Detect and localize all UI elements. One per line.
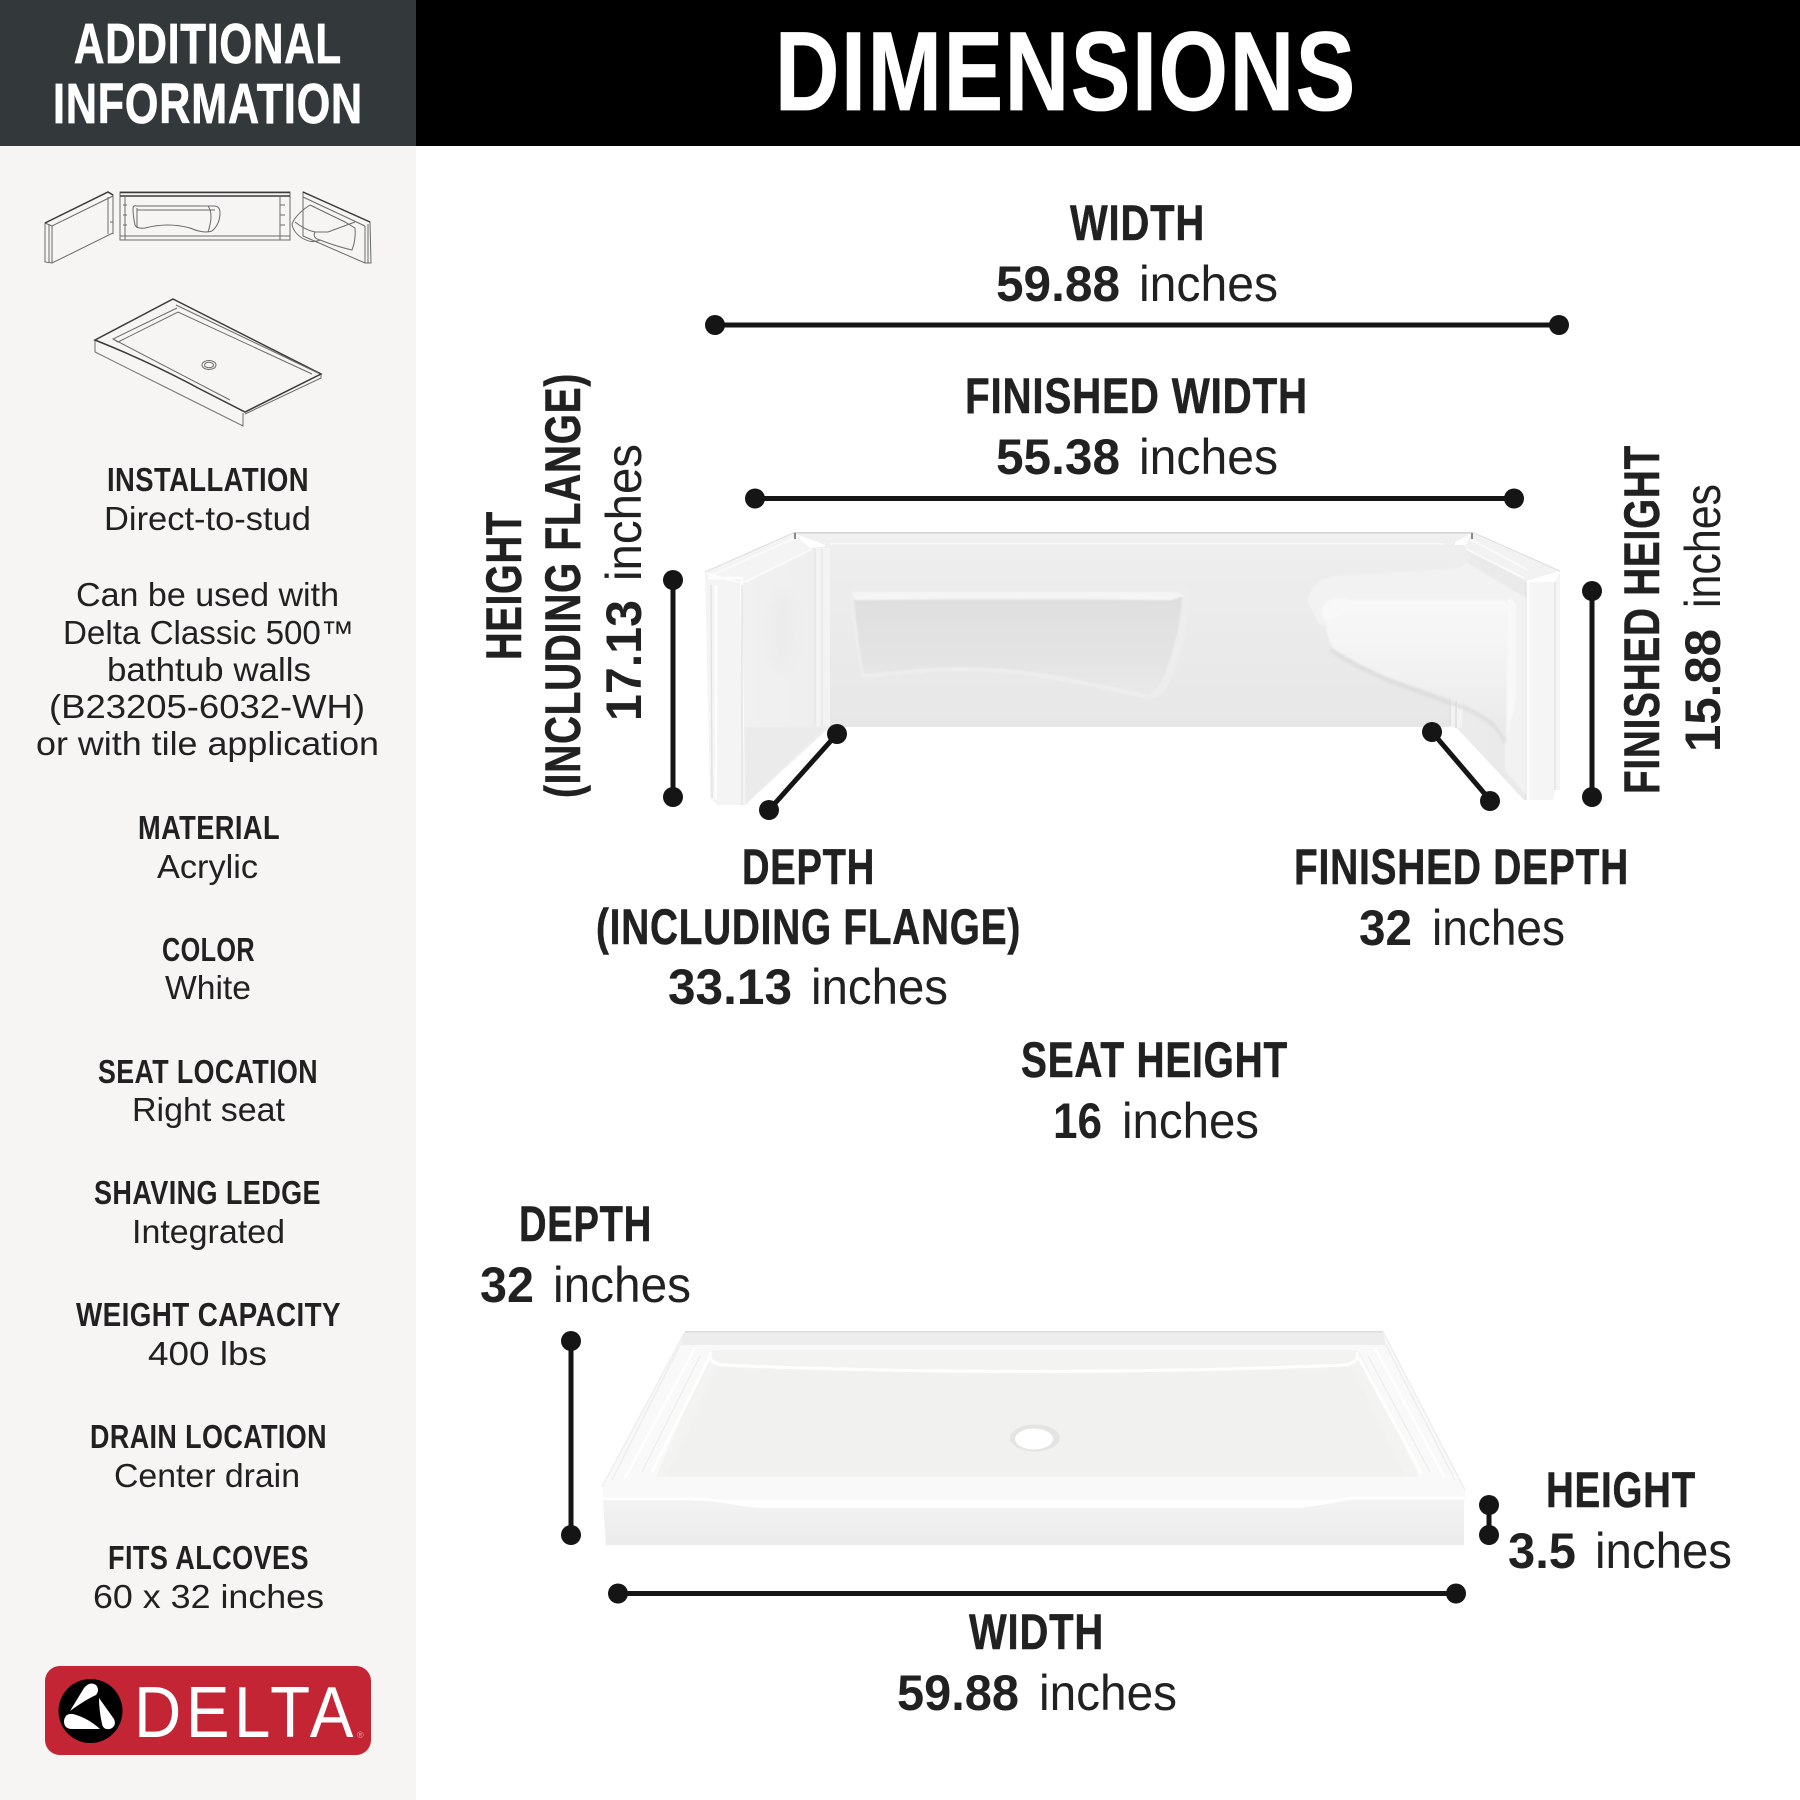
info: fits alcoves — [93, 1539, 324, 1615]
logo: delta — [45, 1666, 371, 1755]
seat shadow — [1330, 650, 1505, 742]
niche: shaving ledge — [848, 587, 1189, 699]
dimension: seat height: 16 — [1053, 1093, 1102, 1149]
dimension: base width — [608, 1584, 1466, 1721]
dimension: seat height: SEAT HEIGHT — [1021, 1032, 1288, 1088]
dimension: finished width: FINISHED WIDTH — [965, 368, 1308, 424]
info: weight capacity: WEIGHT CAPACITY — [76, 1296, 341, 1333]
info: drain location: DRAIN LOCATION — [90, 1418, 327, 1455]
dimension: finished height: 15.88 — [1675, 629, 1731, 752]
arrow: finished depth line — [1422, 722, 1500, 811]
dimension: finished depth: inches — [1432, 900, 1565, 956]
icon: wall panels line drawing — [45, 192, 371, 263]
dimension: base depth: 32 — [480, 1257, 534, 1313]
info: installation — [104, 461, 311, 537]
dimension: width: WIDTH — [1070, 195, 1205, 251]
image: bathtub wall set — [705, 532, 1560, 805]
back rim band — [680, 1332, 1386, 1345]
info: drain location: Center drain — [114, 1457, 300, 1494]
info: seat location — [98, 1053, 318, 1128]
sidebar heading: INFORMATION — [53, 72, 363, 136]
dimension: seat height — [1021, 1032, 1288, 1149]
sidebar heading: ADDITIONAL — [74, 12, 342, 76]
dimension: base height: inches — [1595, 1523, 1732, 1579]
info: seat location: SEAT LOCATION — [98, 1053, 318, 1090]
dimension: height including flange: 17.13 — [596, 600, 652, 721]
dimension: seat height: inches — [1122, 1093, 1259, 1149]
dimension: finished height — [1582, 445, 1731, 807]
dimension: base width: 59.88 — [897, 1665, 1019, 1721]
dimension: width: 59.88 — [996, 256, 1120, 312]
dimension: finished height: FINISHED HEIGHT — [1614, 445, 1670, 794]
dimension: depth including flange: (INCLUDING FLANGE) — [596, 899, 1021, 955]
top lip — [793, 533, 1472, 545]
info: fits alcoves: 60 x 32 inches — [93, 1578, 324, 1615]
sidebar heading — [0, 0, 416, 146]
info: material — [138, 809, 280, 885]
dimension: base height: HEIGHT — [1546, 1462, 1696, 1518]
dimension: depth including flange: DEPTH — [742, 839, 875, 895]
drain — [1010, 1424, 1060, 1452]
info: compatibility note: bathtub walls — [107, 651, 311, 688]
arrow: base width line — [608, 1584, 1466, 1604]
dimension: height including flange: inches — [596, 444, 652, 581]
info: color: COLOR — [162, 931, 255, 968]
dimension: finished depth — [1294, 722, 1629, 956]
dimension: base width: WIDTH — [969, 1604, 1104, 1660]
front face — [603, 1500, 1464, 1545]
info: color — [162, 931, 255, 1006]
dimension: height including flange: (INCLUDING FLANGE) — [535, 373, 591, 798]
info: weight capacity: 400 lbs — [148, 1335, 267, 1372]
info: fits alcoves: FITS ALCOVES — [108, 1539, 309, 1576]
info: shaving ledge: SHAVING LEDGE — [94, 1174, 321, 1211]
dimension: height including flange: HEIGHT — [476, 511, 532, 660]
info: compatibility note: Can be used with — [76, 576, 339, 613]
arrow: finished height line — [1582, 581, 1602, 807]
dimension: base depth: DEPTH — [519, 1196, 652, 1252]
back wall — [825, 543, 1455, 727]
info: compatibility note: or with tile application — [36, 725, 379, 762]
dimension: base depth: inches — [553, 1257, 691, 1313]
icon: shower base line drawing — [95, 299, 321, 426]
info: installation: Direct-to-stud — [104, 500, 311, 537]
dimension: depth including flange: 33.13 — [668, 959, 792, 1015]
logo: delta: ® — [357, 1730, 364, 1740]
arrow: base height line — [1479, 1495, 1499, 1545]
info: shaving ledge: Integrated — [132, 1213, 285, 1250]
logo: delta: DELTA — [134, 1673, 358, 1753]
image: shower base — [602, 1331, 1465, 1545]
right side panel — [1454, 545, 1526, 800]
info: compatibility note: Delta Classic 500™ — [63, 614, 354, 651]
basin floor — [656, 1350, 1419, 1477]
info: compatibility note: (B23205-6032-WH) — [49, 688, 365, 725]
info: material: Acrylic — [157, 848, 258, 885]
dimension: finished height: inches — [1675, 484, 1731, 608]
dimension: finished width — [745, 368, 1524, 508]
dimension: height including flange — [476, 373, 683, 807]
arrow: height line — [663, 570, 683, 807]
dimension: finished depth: FINISHED DEPTH — [1294, 839, 1629, 895]
info: seat location: Right seat — [132, 1091, 285, 1128]
icon: delta emblem — [58, 1679, 122, 1743]
header: dimensions bar — [416, 0, 1800, 146]
info: drain location — [90, 1418, 327, 1494]
side slopes — [602, 1332, 1465, 1490]
info: installation: INSTALLATION — [107, 461, 309, 498]
arrow: width line — [705, 315, 1569, 335]
dimension: base height — [1479, 1462, 1732, 1579]
arrow: finished width line — [745, 488, 1524, 508]
info: material: MATERIAL — [138, 809, 280, 846]
dimension: base width: inches — [1039, 1665, 1177, 1721]
dimension: base height: 3.5 — [1508, 1523, 1576, 1579]
dimension: finished width: inches — [1139, 429, 1278, 485]
arrow: base depth line — [561, 1331, 581, 1545]
dimension: finished width: 55.38 — [996, 429, 1120, 485]
panel: additional information sidebar — [0, 0, 416, 1800]
info: shaving ledge — [94, 1174, 321, 1250]
dimension: width — [705, 195, 1569, 335]
info: color: White — [165, 969, 251, 1006]
dimension: finished depth: 32 — [1359, 900, 1412, 956]
dimension: base depth — [480, 1196, 691, 1545]
left side panel — [742, 546, 830, 805]
dimension: depth including flange — [596, 724, 1021, 1015]
seat: corner bench — [1308, 545, 1526, 795]
arrow: depth line — [759, 724, 847, 820]
rim surface — [603, 1332, 1465, 1500]
dimension: depth including flange: inches — [811, 959, 948, 1015]
info: compatibility note — [36, 576, 379, 762]
title: dimensions: DIMENSIONS — [775, 9, 1357, 134]
info: weight capacity — [76, 1296, 341, 1372]
dimension: width: inches — [1139, 256, 1278, 312]
